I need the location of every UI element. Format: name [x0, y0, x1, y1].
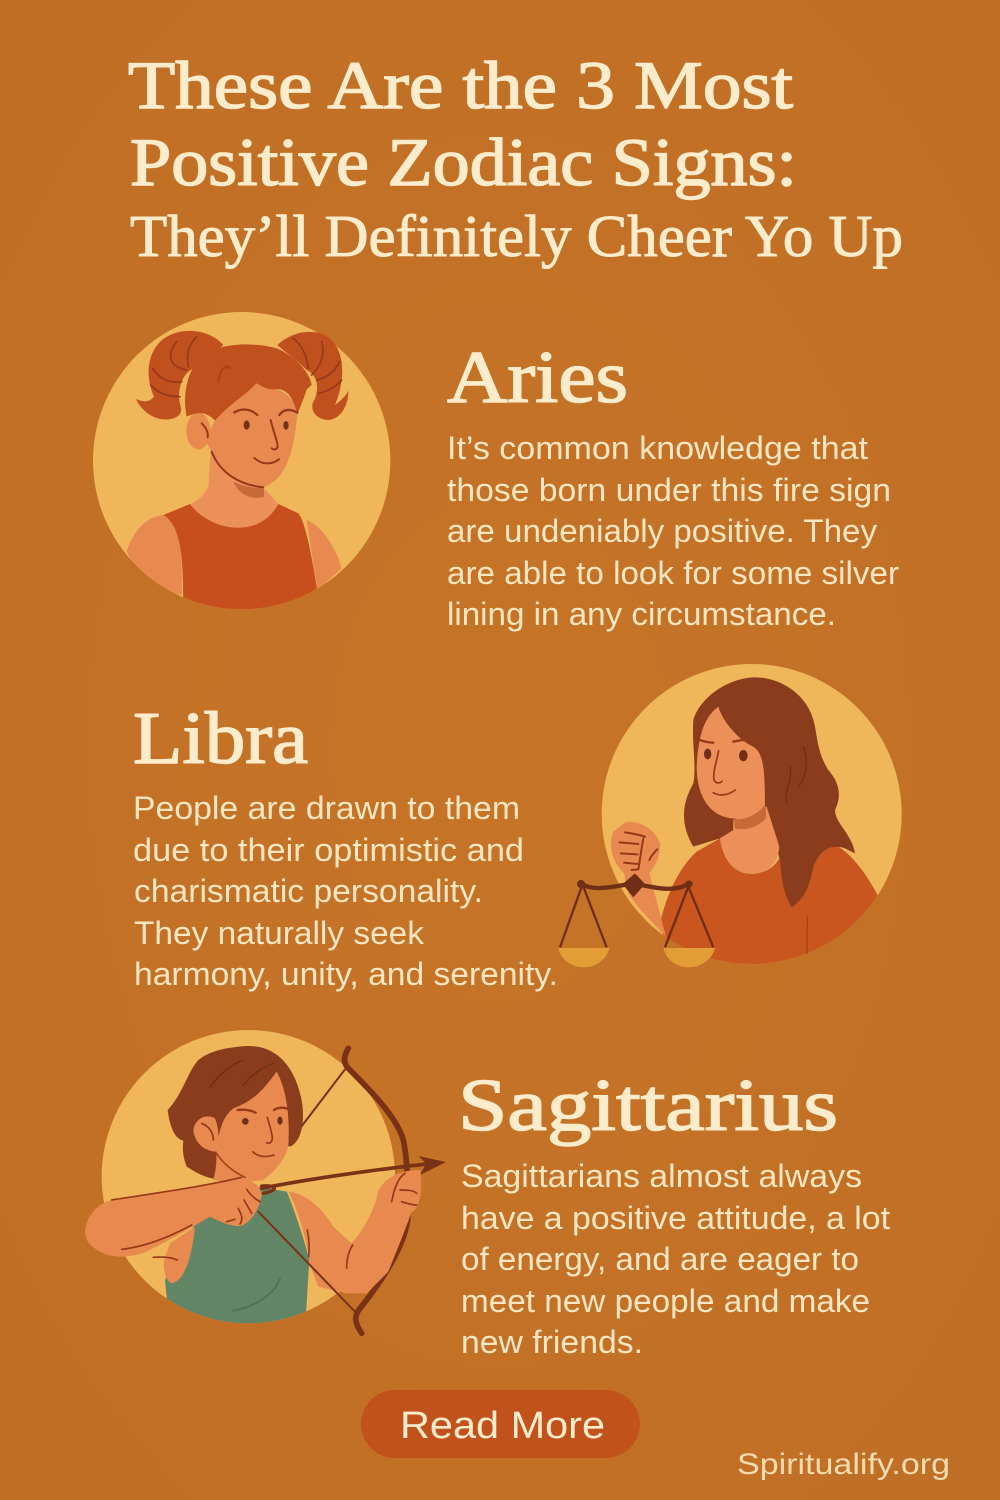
- text block: Sagittarius description: new friends.: [461, 1324, 643, 1360]
- panel: Aries: [93, 312, 899, 632]
- text block: Aries description: It’s common knowledge that: [447, 430, 868, 466]
- text block: Libra description: People are drawn to them: [133, 790, 520, 826]
- illustration: Libra woman holding scales: [558, 664, 902, 977]
- panel: Libra: [133, 664, 902, 992]
- title: They’ll Definitely Cheer Yo Up: [130, 203, 903, 269]
- text block: Libra description: [133, 790, 558, 992]
- text block: Sagittarius description: have a positive attitude, a lot: [461, 1200, 890, 1236]
- text block: Sagittarius description: meet new people and make: [461, 1283, 870, 1319]
- text block: Libra description: They naturally seek: [134, 915, 425, 951]
- scales: [558, 873, 715, 967]
- text block: Libra description: harmony, unity, and serenity.: [134, 956, 558, 992]
- text block: Aries description: are able to look for some silver: [447, 555, 899, 591]
- bow: [300, 1048, 408, 1333]
- text block: Aries description: [447, 430, 899, 632]
- title: Positive Zodiac Signs:: [130, 124, 797, 200]
- footer: site credit: Spiritualify.org: [737, 1448, 950, 1481]
- text block: Libra description: charismatic personality.: [134, 873, 483, 909]
- text block: Sagittarius description: [461, 1158, 890, 1360]
- text block: Sagittarius description: Sagittarians almost always: [461, 1158, 862, 1194]
- text block: Libra description: due to their optimistic and: [133, 832, 524, 868]
- heading: Sagittarius: Sagittarius: [458, 1065, 838, 1147]
- heading: Aries: Aries: [447, 337, 628, 419]
- illustration: Sagittarius archer: [85, 1030, 446, 1333]
- text block: Aries description: are undeniably positive. They: [447, 513, 877, 549]
- button: Read More: Read More: [400, 1405, 605, 1447]
- heading: Libra: Libra: [133, 698, 308, 780]
- text block: Aries description: those born under this fire sign: [447, 472, 891, 508]
- title: [128, 47, 903, 269]
- panel: Sagittarius: [85, 1030, 890, 1360]
- illustration: Aries girl with ram horns: [93, 312, 390, 617]
- text block: Sagittarius description: of energy, and are eager to: [461, 1241, 859, 1277]
- button: Read More: [361, 1390, 640, 1458]
- title: These Are the 3 Most: [128, 47, 793, 123]
- text block: Aries description: lining in any circumstance.: [447, 596, 836, 632]
